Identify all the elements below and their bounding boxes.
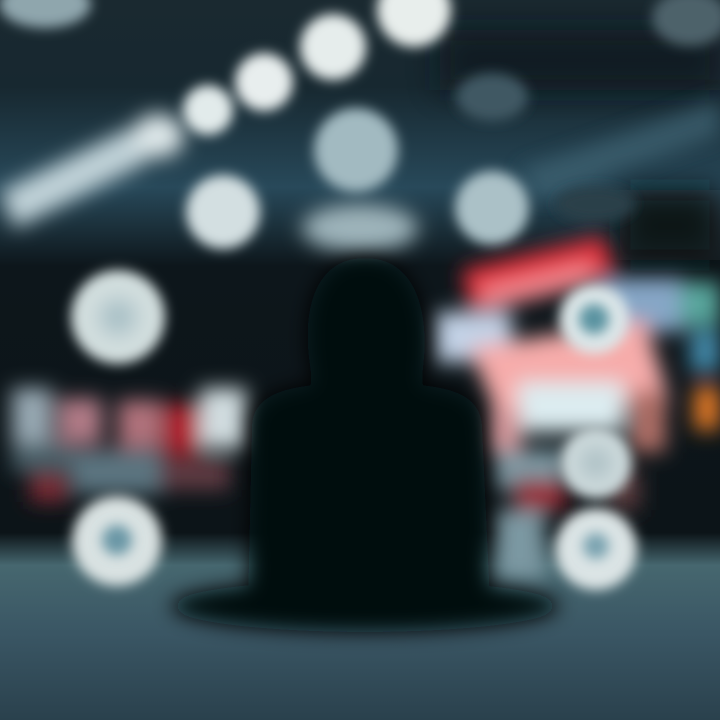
left screen cluster [12, 388, 246, 502]
floating icon circles, upper [186, 108, 529, 252]
left icon circle [71, 270, 165, 364]
right screen cluster [436, 236, 720, 580]
ceiling lights [0, 0, 720, 222]
lower left icon circle [72, 496, 162, 586]
light strip: diagonal beam [0, 114, 184, 228]
right icon circles [555, 284, 637, 590]
ceiling shadows and streak [440, 30, 720, 260]
silhouette: seated figure [171, 258, 559, 632]
